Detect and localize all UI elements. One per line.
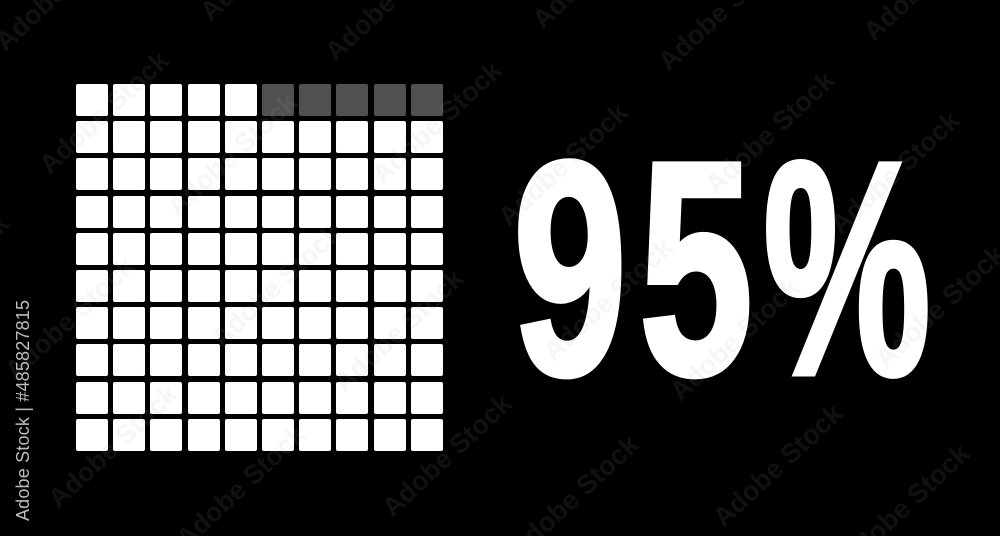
watermark: repeated diagonal stock text: Adobe Stock bbox=[366, 55, 508, 190]
watermark: repeated diagonal stock text: Adobe Stock bbox=[328, 263, 470, 398]
watermark: repeated diagonal stock text: Adobe Stock bbox=[824, 105, 966, 240]
waffle chart: 95 of 100 squares filled bbox=[76, 84, 443, 451]
big percentage figure: 5 bbox=[639, 98, 753, 438]
watermark: repeated diagonal stock text: Adobe Stock bbox=[33, 45, 175, 180]
watermark: repeated diagonal stock text: Adobe Stock bbox=[664, 272, 806, 407]
big percentage figure: 9 bbox=[513, 98, 627, 438]
big percentage figure bbox=[513, 98, 931, 438]
watermark: repeated diagonal stock text: Adobe Stock bbox=[699, 65, 841, 200]
watermark: repeated diagonal stock text: Adobe Stock bbox=[376, 388, 518, 523]
watermark: repeated diagonal stock text: Adobe Stock bbox=[161, 87, 303, 222]
watermark: repeated diagonal stock text: Adobe Stock bbox=[0, 251, 141, 386]
big percentage figure: % bbox=[763, 98, 931, 438]
watermark: repeated diagonal stock text: Adobe Stock bbox=[537, 232, 679, 367]
stock credit: vertical text on left edge: Adobe Stock | #485827815 bbox=[13, 300, 33, 521]
watermark: repeated diagonal stock text: Adobe Stock bbox=[707, 398, 849, 533]
watermark: repeated diagonal stock text: Adobe Stock bbox=[42, 379, 184, 514]
watermark: repeated diagonal stock text: Adobe Stock bbox=[205, 218, 347, 353]
watermark: repeated diagonal stock text: Adobe Stock bbox=[492, 97, 634, 232]
